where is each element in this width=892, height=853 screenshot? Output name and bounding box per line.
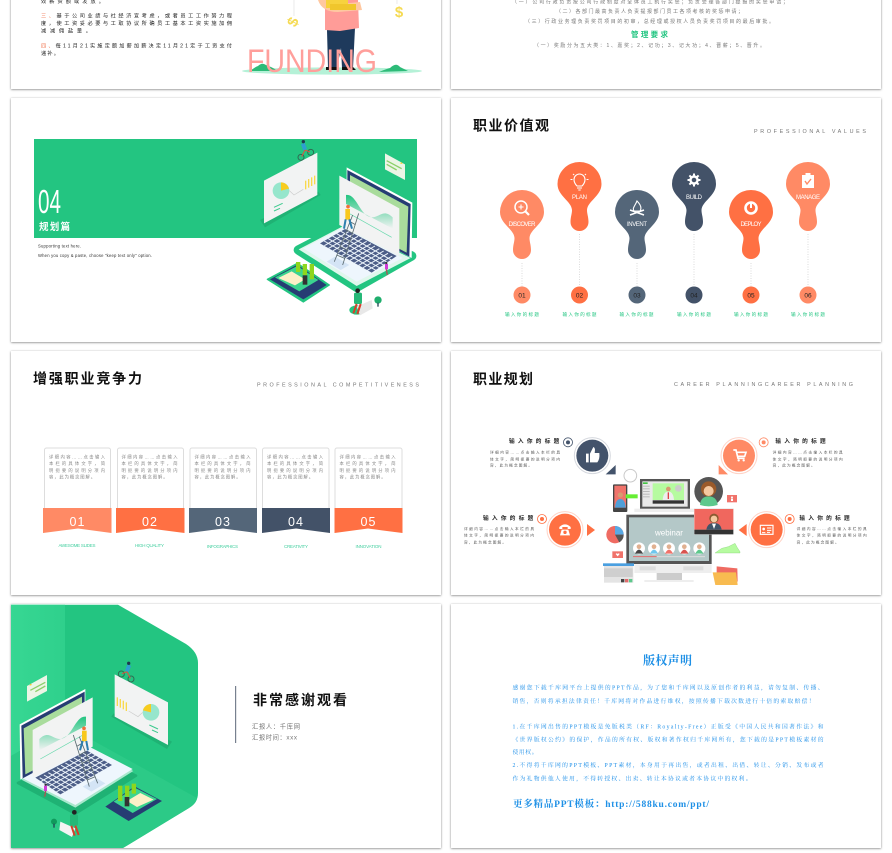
illustration: funding figure (242, 0, 422, 75)
policy text block: 减减佣盐量。 (41, 26, 91, 34)
callout: top right cart: 详细内容……点击输入本栏的具 (773, 450, 843, 455)
drop: manage: MANAGE (796, 195, 820, 201)
drop: invent (615, 190, 659, 259)
copyright body: 使用权。 (512, 748, 538, 756)
card 05: 详细内容……点击输入 (340, 454, 396, 460)
supporting text: Supporting text here. (38, 244, 81, 248)
callout: top left thumbs up (490, 437, 616, 474)
callout: top left thumbs up: 体文字，简明扼要的说明分项内 (490, 456, 560, 461)
requirement lines: （一）奖励分为五大类：1、嘉奖；2、记功；3、记大功；4、晋薪；5、晋升。 (534, 42, 765, 49)
drop: discover (500, 190, 544, 259)
divider (235, 686, 236, 743)
callout: top right cart: 输入你的标题 (775, 437, 826, 445)
card 03: 明扼要的说明分项内 (194, 467, 250, 474)
panel: salary policy slide (11, 0, 441, 89)
callout: top left thumbs up: 详细内容……点击输入本栏的具 (490, 450, 560, 455)
illustration: webinar devices: webinar (654, 528, 683, 537)
callout: top left thumbs up: 容，此为概念图解。 (490, 463, 532, 468)
drop: manage (786, 162, 830, 231)
card 05: 明扼要的说明分项内 (340, 467, 396, 474)
number badges: 03 (633, 292, 641, 299)
number badges: 02 (576, 292, 583, 299)
card 02: 详细内容……点击输入 (122, 454, 178, 460)
drop: deploy: DEPLOY (740, 222, 762, 228)
card 03: 容，此为概念图解。 (194, 474, 240, 481)
policy text block: 度，使工资妥必要与工取协议所确员工基本工资实施加佣 (41, 19, 232, 27)
subtitle: PROFESSIONAL COMPETITIVENESS (257, 382, 419, 388)
drop: deploy (729, 190, 773, 259)
supporting text: When you copy & paste, choose "keep text only" option. (38, 253, 152, 258)
policy text block: 四、 每11月21实施定额加薪加薪决定11月21定于工资支付 (41, 42, 232, 50)
heading: 管理要求: 管理要求 (631, 29, 668, 39)
panel: copyright notice (451, 604, 881, 848)
card 05: 05 (361, 515, 376, 529)
callout: right contact card: 容，此为概念图解。 (797, 539, 839, 544)
callout: right contact card: 体文字，简明扼要的说明分项内 (797, 533, 867, 538)
copyright body: 作为礼物供他人使用，不得转授权、出卖、转让本协议或者本协议中的权利。 (512, 774, 752, 782)
card 01: 本栏的具体文字，简 (49, 460, 105, 467)
green banner (34, 139, 417, 238)
green hexagon background (11, 605, 198, 848)
value captions: 输入你的标题 (791, 311, 825, 318)
panel: section 04 planning (11, 98, 441, 342)
card 02 (116, 448, 184, 548)
heading: 职业规划 (473, 371, 533, 387)
card 05: 容，此为概念图解。 (340, 474, 386, 481)
presenter details (252, 721, 300, 742)
card 03 (189, 448, 257, 549)
panel: management requirements slide (451, 0, 881, 89)
section number: 04 (38, 183, 61, 220)
card 01: 详细内容……点击输入 (49, 454, 106, 460)
subtitle: CAREER PLANNINGCAREER PLANNING (674, 382, 853, 388)
card 04: 本栏的具体文字，简 (267, 460, 323, 467)
copyright title: 版权声明 (643, 652, 692, 668)
card 04: 明扼要的说明分项内 (267, 467, 323, 474)
callout: left telephone: 容，此为概念图解。 (464, 539, 506, 544)
callout: top right cart: 体文字，简明扼要的说明分项内 (773, 456, 843, 461)
drop: discover: DISCOVER (508, 222, 536, 228)
callout: right contact card: 详细内容……点击输入本栏的具 (797, 526, 867, 531)
card 03: 03 (215, 515, 231, 529)
panel: professional values (451, 98, 881, 342)
card 04: 详细内容……点击输入 (267, 454, 324, 460)
card 02: 明扼要的说明分项内 (122, 467, 178, 474)
card 02: 02 (142, 515, 158, 529)
copyright body: 《世界版权公约》的保护，作品的所有权、版权和著作权归千库网所有，您下载的是PPT模板素材的 (512, 736, 824, 744)
card 01: 明扼要的说明分项内 (49, 467, 105, 474)
illustration: isometric laptop (260, 140, 412, 315)
card 05: 本栏的具体文字，简 (340, 460, 396, 467)
supporting text (38, 244, 152, 258)
card 04: 04 (288, 515, 304, 529)
subtitle: PROFESSIONAL VALUES (754, 129, 866, 135)
more templates link text: 更多精品PPT模板：http://588ku.com/ppt/ (513, 798, 709, 810)
heading: 增强职业竞争力 (33, 370, 142, 386)
copyright body (512, 684, 824, 782)
drop: build (672, 162, 716, 231)
card 03: 详细内容……点击输入 (194, 454, 251, 460)
policy text block: 三、 基于公司业绩与社经济宣考虑，或者员工工作努力程 (41, 12, 232, 20)
drop: invent: INVENT (627, 222, 647, 228)
copyright body: 销售，否则将承担法律责任！千库网将对作品进行维权，按照传播下载次数进行十倍的索取赔偿！ (512, 697, 814, 705)
card 01: 01 (70, 515, 85, 529)
card 04: 容，此为概念图解。 (267, 474, 313, 481)
presenter details: 汇报时间：xxx (252, 732, 298, 742)
drop: build: BUILD (686, 195, 703, 201)
card 02: HIGH QUALITY (135, 543, 164, 548)
illustration: funding figure: $ (284, 14, 303, 30)
requirement lines: （二）各部门最高负责人负责提报部门员工各项考核的奖惩申请； (556, 8, 743, 15)
illustration: isometric laptop mirrored (18, 662, 172, 837)
value captions: 输入你的标题 (505, 311, 539, 318)
value captions: 输入你的标题 (677, 311, 711, 318)
card 04: CREATIVITY (284, 544, 308, 549)
callout: top right cart: 容，此为概念图解。 (773, 463, 815, 468)
requirement lines (512, 0, 788, 49)
thank-you title: 非常感谢观看 (253, 692, 347, 708)
panel: professional competitiveness (11, 351, 441, 595)
policy text block: 递补。 (41, 49, 59, 57)
card 05: INNOVATION (356, 544, 382, 549)
connectors (522, 234, 808, 287)
card 05 (334, 448, 402, 549)
callout: right contact card: 输入你的标题 (799, 514, 850, 522)
callout: right contact card (739, 512, 867, 548)
heading: 职业价值观 (473, 118, 549, 134)
card 04 (262, 448, 330, 549)
drop: plan (558, 162, 602, 231)
callout: left telephone (464, 512, 595, 548)
panel: thank you slide (11, 604, 441, 848)
illustration: funding figure: $ (395, 4, 404, 21)
number badges: 04 (690, 292, 698, 299)
lighter wall stripe (11, 605, 65, 756)
section title: 规划篇 (39, 221, 70, 233)
callout: top right cart (719, 437, 843, 474)
copyright body: 1.在千库网出售的PPT模板是免版税类（RF：Royalty-Free）正版受《中国人民共和国著作法》和 (512, 722, 824, 730)
card 01: 容，此为概念图解。 (49, 474, 95, 481)
callout: left telephone: 体文字，简明扼要的说明分项内 (464, 533, 534, 538)
number badges (514, 286, 816, 304)
card 02: 容，此为概念图解。 (122, 474, 168, 481)
card 03: INFOGRAPHICS (207, 544, 238, 549)
value captions: 输入你的标题 (562, 311, 597, 318)
number badges: 06 (804, 292, 812, 299)
policy text block (41, 0, 232, 57)
FUNDING wordmark: FUNDING (247, 43, 377, 79)
callout: left telephone: 输入你的标题 (483, 514, 534, 522)
card 02: 本栏的具体文字，简 (122, 460, 178, 467)
drop: plan: PLAN (572, 195, 587, 201)
value captions (505, 311, 825, 318)
copyright body: 2.不得将千库网的PPT模板、PPT素材，本身用于再出售，或者出租、出借、转让、分销、发布或者 (512, 761, 824, 769)
illustration: webinar devices (603, 469, 740, 585)
presenter details: 汇报人：千库网 (252, 721, 300, 730)
number badges: 05 (747, 292, 755, 299)
value captions: 输入你的标题 (620, 311, 654, 318)
floor tone (11, 725, 197, 848)
callout: left telephone: 详细内容……点击输入本栏的具 (464, 526, 534, 531)
value captions: 输入你的标题 (734, 311, 768, 318)
card 01 (43, 448, 112, 548)
panel: career planning (451, 351, 881, 595)
card 03: 本栏的具体文字，简 (194, 460, 250, 467)
copyright body: 感谢您下载千库网平台上提供的PPT作品，为了您和千库网以及原创作者的利益，请勿复制、传播、 (512, 684, 824, 692)
callout: top left thumbs up: 输入你的标题 (509, 437, 560, 445)
requirement lines: （三）行政业务理负责奖罚项目的初审，总经理或授权人员负责奖罚项目的最后审批。 (525, 18, 774, 25)
card 01: AWESOME SLIDES (58, 543, 96, 548)
number badges: 01 (518, 292, 526, 299)
